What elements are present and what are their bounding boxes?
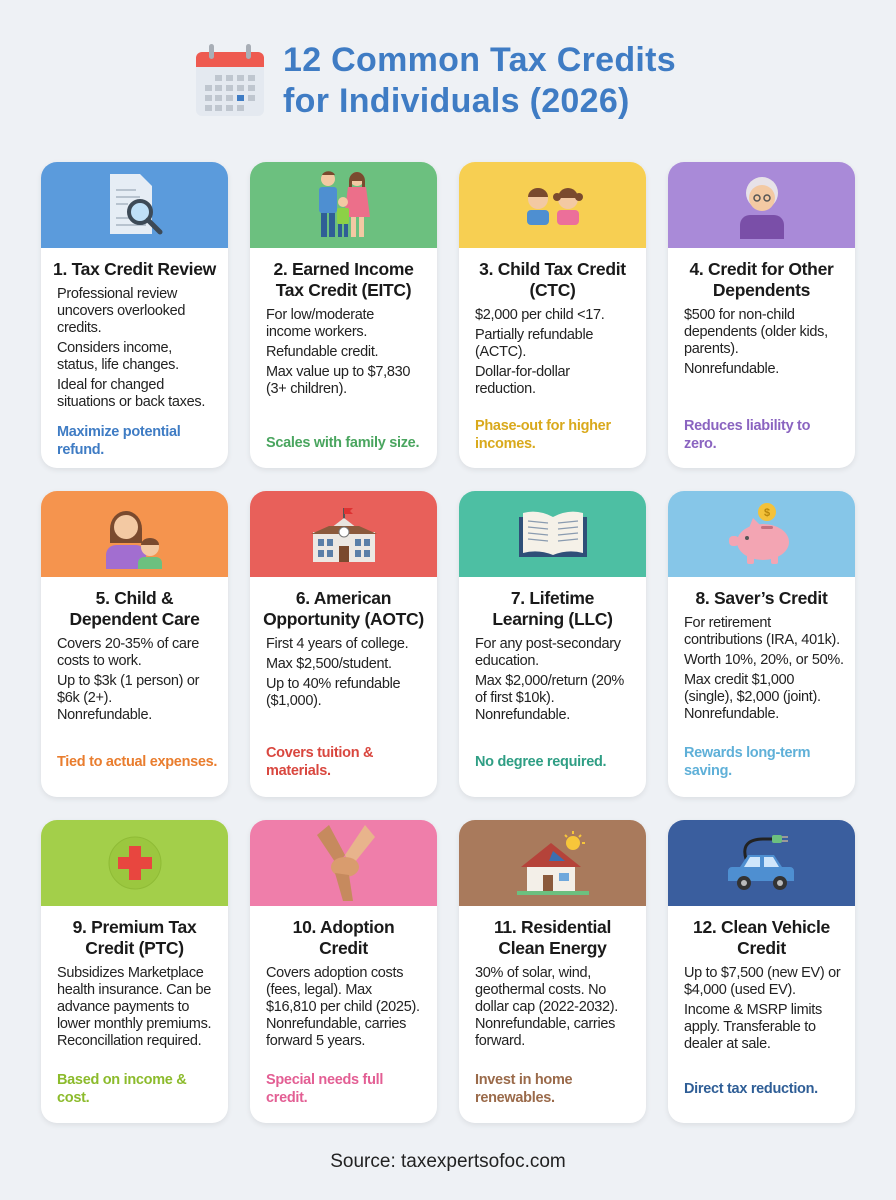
card body: Covers adoption costs bbox=[266, 965, 403, 981]
card 6 bbox=[250, 491, 437, 797]
card 9 bbox=[41, 820, 228, 1123]
card body bbox=[57, 636, 200, 723]
card 10 bbox=[250, 820, 437, 1123]
card title: Credit bbox=[319, 938, 368, 958]
card body bbox=[475, 307, 605, 397]
card body: situations or back taxes. bbox=[57, 394, 205, 410]
card body: Nonrefundable. bbox=[684, 706, 779, 722]
card body: income workers. bbox=[266, 324, 367, 340]
card title: 9. Premium Tax bbox=[73, 917, 196, 937]
footer note bbox=[57, 1072, 186, 1106]
card title: 11. Residential bbox=[494, 917, 611, 937]
footer note bbox=[684, 745, 810, 779]
footer note: Phase-out for higher bbox=[475, 418, 611, 434]
card title bbox=[689, 259, 834, 300]
card 7 bbox=[459, 491, 646, 797]
card 3 bbox=[459, 162, 646, 468]
icon: family bbox=[250, 162, 437, 248]
footer note bbox=[266, 1072, 383, 1106]
card body: dollar cap (2022-2032). bbox=[475, 999, 618, 1015]
card body: advance payments to bbox=[57, 999, 189, 1015]
card body: Max credit $1,000 bbox=[684, 672, 794, 688]
footer note: materials. bbox=[266, 763, 331, 779]
title bbox=[283, 41, 676, 120]
card title: Clean Energy bbox=[498, 938, 607, 958]
card body: parents). bbox=[684, 341, 739, 357]
card body bbox=[57, 965, 211, 1049]
icon: two kids bbox=[459, 162, 646, 248]
card title bbox=[293, 917, 394, 958]
card title: 1. Tax Credit Review bbox=[53, 259, 216, 279]
card body: Partially refundable bbox=[475, 327, 593, 343]
footer note: refund. bbox=[57, 442, 104, 458]
card body: Nonrefundable, carries bbox=[475, 1016, 615, 1032]
card body: reduction. bbox=[475, 381, 536, 397]
card title bbox=[70, 588, 200, 629]
card body: Dollar-for-dollar bbox=[475, 364, 570, 380]
card body: Income & MSRP limits bbox=[684, 1002, 822, 1018]
card body: (3+ children). bbox=[266, 381, 347, 397]
card body: Professional review bbox=[57, 286, 177, 302]
icon: electric car bbox=[668, 820, 855, 906]
card body: $4,000 (used EV). bbox=[684, 982, 796, 998]
card body: education. bbox=[475, 653, 539, 669]
card title: 7. Lifetime bbox=[511, 588, 594, 608]
card body: status, life changes. bbox=[57, 357, 179, 373]
card body: $6k (2+). bbox=[57, 690, 112, 706]
card body: contributions (IRA, 401k). bbox=[684, 632, 840, 648]
card title: Learning (LLC) bbox=[492, 609, 613, 629]
card title: 5. Child & bbox=[96, 588, 173, 608]
card body bbox=[684, 615, 844, 722]
footer note: Direct tax reduction. bbox=[684, 1081, 818, 1097]
card title bbox=[73, 917, 196, 958]
card title: 8. Saver’s Credit bbox=[695, 588, 828, 608]
card body: Nonrefundable. bbox=[684, 361, 779, 377]
footer note: zero. bbox=[684, 436, 716, 452]
card body: dealer at sale. bbox=[684, 1036, 771, 1052]
card title: Credit (PTC) bbox=[85, 938, 184, 958]
icon: piggy bank bbox=[668, 491, 855, 577]
card title bbox=[479, 259, 626, 300]
footer note: cost. bbox=[57, 1090, 89, 1106]
card body bbox=[684, 307, 828, 377]
card body: $500 for non-child bbox=[684, 307, 795, 323]
card title bbox=[492, 588, 613, 629]
card body: Up to 40% refundable bbox=[266, 676, 400, 692]
card title: 12. Clean Vehicle bbox=[693, 917, 830, 937]
footer note: Scales with family size. bbox=[266, 435, 419, 451]
card body: Reconcillation required. bbox=[57, 1033, 201, 1049]
card title: Tax Credit (EITC) bbox=[276, 280, 411, 300]
card body: Covers 20-35% of care bbox=[57, 636, 199, 652]
card title: Credit bbox=[737, 938, 786, 958]
card body: Up to $7,500 (new EV) or bbox=[684, 965, 840, 981]
card title bbox=[273, 259, 414, 300]
card body: Subsidizes Marketplace bbox=[57, 965, 204, 981]
footer note: Special needs full bbox=[266, 1072, 383, 1088]
footer note: renewables. bbox=[475, 1090, 555, 1106]
card body: (ACTC). bbox=[475, 344, 526, 360]
card body: credits. bbox=[57, 320, 101, 336]
footer note: credit. bbox=[266, 1090, 307, 1106]
card body bbox=[475, 965, 618, 1049]
icon: document magnifier bbox=[41, 162, 228, 248]
card body: Refundable credit. bbox=[266, 344, 378, 360]
title: for Individuals (2026) bbox=[283, 82, 630, 120]
footer note: Covers tuition & bbox=[266, 745, 373, 761]
card 2 bbox=[250, 162, 437, 468]
card title bbox=[263, 588, 424, 629]
card body: Nonrefundable. bbox=[57, 707, 152, 723]
card body: For any post-secondary bbox=[475, 636, 621, 652]
card 1 bbox=[41, 162, 228, 468]
card body: forward 5 years. bbox=[266, 1033, 365, 1049]
footer note bbox=[266, 745, 373, 779]
footer note: Rewards long-term bbox=[684, 745, 810, 761]
icon: medical cross bbox=[41, 820, 228, 906]
card body: costs to work. bbox=[57, 653, 141, 669]
icon: elderly person bbox=[668, 162, 855, 248]
footer note: Tied to actual expenses. bbox=[57, 754, 217, 770]
card body: forward. bbox=[475, 1033, 525, 1049]
card body: health insurance. Can be bbox=[57, 982, 211, 998]
card body: Nonrefundable, carries bbox=[266, 1016, 406, 1032]
icon: holding hands bbox=[250, 820, 437, 906]
footer note: Maximize potential bbox=[57, 424, 181, 440]
card title: Dependents bbox=[713, 280, 810, 300]
footer note bbox=[57, 424, 181, 458]
card body: Worth 10%, 20%, or 50%. bbox=[684, 652, 844, 668]
card 4 bbox=[668, 162, 855, 468]
card body: For retirement bbox=[684, 615, 771, 631]
card body bbox=[684, 965, 840, 1052]
card body: Max $2,000/return (20% bbox=[475, 673, 624, 689]
icon: school building bbox=[250, 491, 437, 577]
card 5 bbox=[41, 491, 228, 797]
footer note: incomes. bbox=[475, 436, 535, 452]
card body: dependents (older kids, bbox=[684, 324, 828, 340]
card title: 6. American bbox=[296, 588, 391, 608]
icon: house with solar bbox=[459, 820, 646, 906]
card title bbox=[494, 917, 611, 958]
card body: Considers income, bbox=[57, 340, 172, 356]
card body: ($1,000). bbox=[266, 693, 321, 709]
card 12 bbox=[668, 820, 855, 1123]
card body bbox=[57, 286, 205, 410]
title: 12 Common Tax Credits bbox=[283, 41, 676, 79]
card body: 30% of solar, wind, bbox=[475, 965, 591, 981]
icon: piggy bank: $ bbox=[763, 507, 770, 519]
card title: Dependent Care bbox=[70, 609, 200, 629]
card body bbox=[266, 307, 410, 397]
footer note bbox=[475, 1072, 572, 1106]
card title: 10. Adoption bbox=[293, 917, 394, 937]
card body: Ideal for changed bbox=[57, 377, 164, 393]
card title: (CTC) bbox=[529, 280, 576, 300]
icon: open book bbox=[459, 491, 646, 577]
footer note bbox=[475, 418, 611, 452]
card body: $2,000 per child <17. bbox=[475, 307, 605, 323]
card body: lower monthly premiums. bbox=[57, 1016, 211, 1032]
card title: 4. Credit for Other bbox=[689, 259, 834, 279]
card body: Up to $3k (1 person) or bbox=[57, 673, 199, 689]
card body bbox=[266, 965, 420, 1049]
source: Source: taxexpertsofoc.com bbox=[330, 1151, 566, 1172]
card body: geothermal costs. No bbox=[475, 982, 606, 998]
card body bbox=[475, 636, 624, 723]
card 11 bbox=[459, 820, 646, 1123]
footer note: saving. bbox=[684, 763, 732, 779]
card body: First 4 years of college. bbox=[266, 636, 408, 652]
card body: of first $10k). bbox=[475, 690, 554, 706]
card 8 bbox=[668, 491, 855, 797]
card body bbox=[266, 636, 408, 709]
card body: (single), $2,000 (joint). bbox=[684, 689, 821, 705]
card body: Max $2,500/student. bbox=[266, 656, 392, 672]
card body: Max value up to $7,830 bbox=[266, 364, 410, 380]
footer note: No degree required. bbox=[475, 754, 606, 770]
footer note: Based on income & bbox=[57, 1072, 186, 1088]
card body: For low/moderate bbox=[266, 307, 374, 323]
card title: 3. Child Tax Credit bbox=[479, 259, 626, 279]
card title: 2. Earned Income bbox=[273, 259, 414, 279]
card body: (fees, legal). Max bbox=[266, 982, 372, 998]
footer note bbox=[684, 418, 810, 452]
card title bbox=[693, 917, 830, 958]
card body: uncovers overlooked bbox=[57, 303, 185, 319]
footer note: Reduces liability to bbox=[684, 418, 810, 434]
icon: parent and child bbox=[41, 491, 228, 577]
card body: $16,810 per child (2025). bbox=[266, 999, 420, 1015]
footer note: Invest in home bbox=[475, 1072, 572, 1088]
card body: apply. Transferable to bbox=[684, 1019, 816, 1035]
icon: calendar bbox=[196, 44, 264, 116]
card title: Opportunity (AOTC) bbox=[263, 609, 424, 629]
card body: Nonrefundable. bbox=[475, 707, 570, 723]
